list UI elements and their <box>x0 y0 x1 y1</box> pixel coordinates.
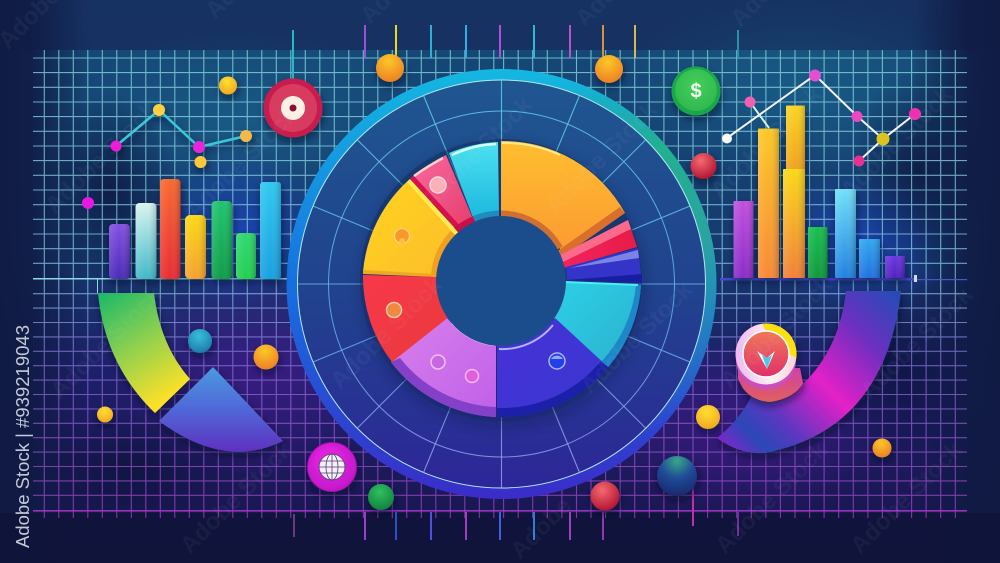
dial disc <box>298 80 706 488</box>
sphere: blue green <box>657 456 697 496</box>
watermarks: Adobe Stock <box>715 271 838 394</box>
left bar chart <box>109 179 281 279</box>
segment: pink <box>410 155 476 236</box>
segment: teal <box>553 282 641 367</box>
watermarks: Adobe Stock <box>415 91 538 214</box>
ball: orange left <box>376 54 404 82</box>
icon: globe badge <box>308 442 356 492</box>
segment: violet <box>391 318 496 417</box>
bar: yellow front <box>783 169 805 278</box>
peg <box>394 228 410 244</box>
segment: cyan <box>449 142 499 226</box>
ball: yellow right <box>696 405 720 429</box>
baselines <box>33 275 967 293</box>
watermarks: Adobe Stock <box>45 281 168 404</box>
icon: dollar coin: $ <box>690 80 702 102</box>
segment: dark blue <box>566 248 642 283</box>
dial ring <box>286 69 716 499</box>
right bar chart <box>734 106 905 278</box>
watermarks: Adobe Stock <box>855 281 978 404</box>
watermarks: Adobe <box>505 492 577 563</box>
bar: yellow back <box>786 106 805 172</box>
watermarks: Adobe Stock <box>540 96 663 219</box>
bar: lime <box>236 233 256 279</box>
segment: orange <box>501 141 625 258</box>
right magenta arc <box>717 291 901 453</box>
bar: green <box>212 201 232 279</box>
ball: yellow <box>219 76 237 94</box>
bar: orange <box>758 128 779 278</box>
ball: orange <box>254 344 278 370</box>
bar: yellow <box>185 215 206 279</box>
peg <box>386 302 402 318</box>
watermarks: Adobe Stock <box>40 96 163 219</box>
watermarks: Adobe Stock <box>180 101 303 224</box>
bar: red <box>160 179 180 279</box>
watermarks: Adobe Stock <box>835 81 958 204</box>
ball: small orange <box>97 406 113 422</box>
ball: red bottom <box>590 482 620 510</box>
watermarks: Adobe Stock <box>845 436 968 559</box>
watermarks: Adobe Stock <box>710 436 833 559</box>
left green-yellow arc <box>98 293 190 413</box>
dot: magenta <box>82 197 94 209</box>
donut hole <box>436 216 566 346</box>
bar: cyan <box>260 182 281 279</box>
dial spokes <box>298 80 706 488</box>
icon: dollar coin <box>672 66 720 116</box>
ball: orange right <box>595 55 623 83</box>
inner bevels <box>434 213 560 275</box>
stock id caption: Adobe Stock | #939219043 <box>13 325 33 548</box>
bottom axis ticks <box>294 490 738 540</box>
bar: light blue <box>835 189 856 278</box>
segment: yellow <box>363 179 462 277</box>
peg <box>430 177 446 193</box>
left blue wedge <box>159 367 283 452</box>
donut chart <box>360 139 642 421</box>
ball: green <box>368 484 394 510</box>
top axis ticks <box>293 25 738 80</box>
ball: teal <box>188 329 212 353</box>
watermarks: Adobe Stock <box>175 436 298 559</box>
segment: red <box>363 275 450 362</box>
peg <box>466 370 478 382</box>
ball: red <box>690 153 716 179</box>
icon: arrow marker <box>736 324 803 402</box>
bar: purple <box>734 201 754 278</box>
watermarks: Adobe Stock <box>705 81 828 204</box>
peg <box>549 353 565 369</box>
segment: indigo <box>497 318 608 417</box>
grid <box>33 50 967 518</box>
right line chart <box>722 70 921 166</box>
bar: violet <box>885 256 905 278</box>
watermarks: Adobe Stock <box>325 271 448 394</box>
bar: purple <box>109 224 130 279</box>
bar: blue <box>859 239 880 278</box>
bar: pale cyan <box>136 203 156 279</box>
peg <box>431 355 445 369</box>
left line chart <box>110 104 252 168</box>
icon: red target <box>264 78 322 138</box>
segment: crimson <box>560 220 637 268</box>
bar: green <box>808 227 828 278</box>
ball: orange right <box>872 438 892 458</box>
watermarks: Adobe Stock <box>575 276 698 399</box>
main radial dial <box>286 69 716 499</box>
